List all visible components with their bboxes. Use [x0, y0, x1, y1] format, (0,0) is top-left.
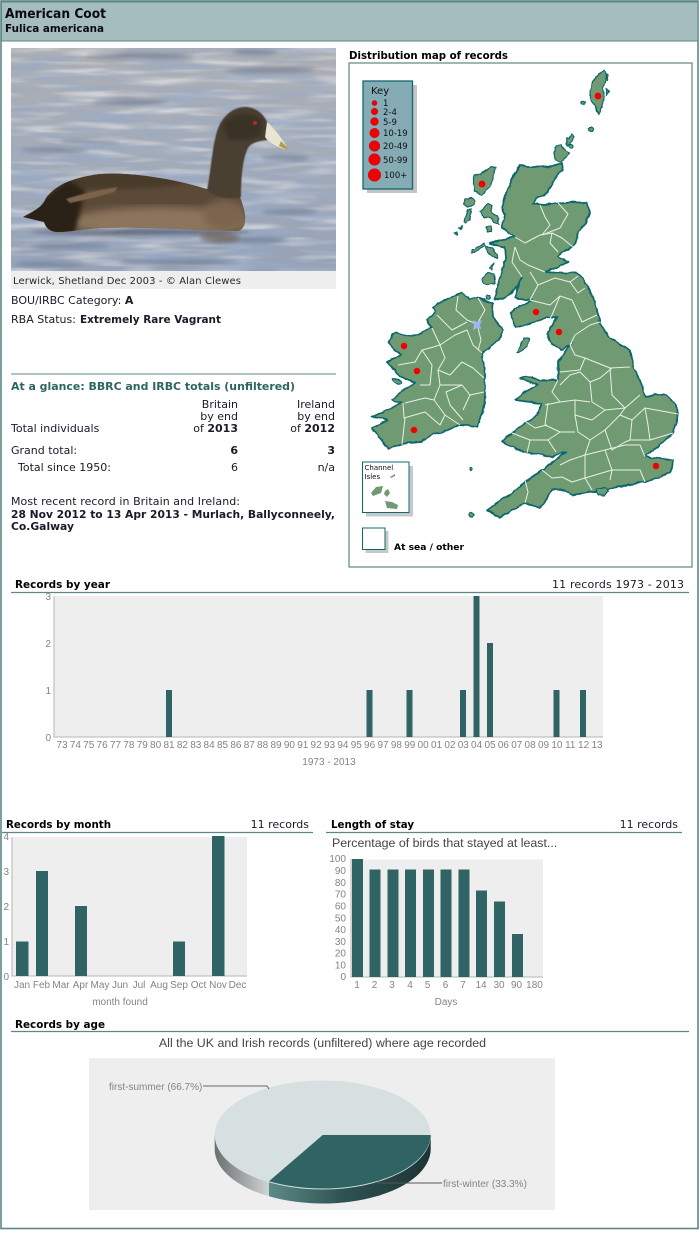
- map: Northern and Western Isles: [392, 70, 609, 518]
- bar chart: year: 88: [257, 740, 269, 751]
- bar chart: month: 0: [3, 972, 9, 983]
- bar chart: year: 00: [418, 740, 429, 751]
- bar chart: year: 98: [391, 740, 402, 751]
- total since 1950 row: 6: [231, 461, 238, 474]
- chart subtitle: All the UK and Irish records (unfiltered) where age recorded: [159, 1036, 486, 1050]
- bar chart: year: 82: [177, 740, 188, 751]
- bar chart: days: 30: [335, 937, 346, 948]
- scientific name: Fulica americana: [5, 22, 104, 35]
- table column headers: Total individuals: [10, 422, 100, 435]
- record count: 11 records 1973 - 2013: [552, 578, 684, 591]
- title: American Coot: [5, 7, 106, 22]
- bar chart: year: 10: [551, 740, 563, 751]
- bar chart: month: Aug: [150, 980, 168, 991]
- panel: at a glance totals: [10, 374, 336, 474]
- photo caption: [11, 271, 336, 289]
- bar chart: year: 89: [270, 740, 282, 751]
- bar chart: days: 2: [372, 980, 378, 991]
- bar chart: days: 40: [335, 925, 346, 936]
- map: land masses: [372, 70, 678, 518]
- bar chart: days: 80: [335, 878, 346, 889]
- bar chart: year: 0: [45, 733, 51, 744]
- record count: 11 records: [620, 818, 678, 831]
- table column headers: [10, 398, 335, 435]
- bar chart: month: Feb: [33, 980, 51, 991]
- panel: length of stay: [326, 818, 682, 1008]
- bar chart: days: Days: [435, 997, 457, 1008]
- Channel Isles inset: Isles: [364, 473, 380, 481]
- bird head shade: [222, 114, 262, 140]
- RBA status: RBA Status:: [11, 313, 76, 326]
- table column headers: by end: [200, 410, 238, 423]
- bar chart: year: 73: [56, 740, 68, 751]
- bar chart: days: 5: [425, 980, 431, 991]
- map key: 100+: [384, 171, 407, 181]
- BOU/IRBC category: BOU/IRBC Category: A: [11, 294, 134, 307]
- bar chart: year: 1973 - 2013: [302, 757, 356, 768]
- bar chart: year: 83: [190, 740, 202, 751]
- RBA status: [11, 313, 221, 326]
- map key: 2-4: [383, 108, 397, 118]
- bar chart: days: 3: [389, 980, 395, 991]
- bird reflection: [30, 230, 250, 243]
- bird upper back: [56, 174, 188, 190]
- table column headers: by end: [297, 410, 335, 423]
- chart subtitle: Percentage of birds that stayed at least...: [332, 836, 557, 850]
- bar chart: month: Mar: [52, 980, 70, 991]
- total since 1950 row: [17, 461, 335, 474]
- bar chart: days: 10: [335, 960, 346, 972]
- bar chart: year: 75: [83, 740, 95, 751]
- Channel Isles inset: Channel: [364, 464, 393, 472]
- bar chart: year: 02: [444, 740, 456, 751]
- bar chart: month: 1: [3, 937, 9, 948]
- panel: records by age: [11, 1018, 689, 1210]
- pie chart: age: first-winter (33.3%): [443, 1179, 527, 1190]
- bird tail: [20, 180, 85, 235]
- bar chart: year: 11: [565, 740, 576, 751]
- bar chart: year: [45, 592, 603, 768]
- at sea box: [362, 528, 465, 553]
- bar chart: year: 79: [137, 740, 148, 751]
- most recent record: Most recent record in Britain and Ireland:: [11, 495, 240, 508]
- bar chart: year: 85: [217, 740, 228, 751]
- bar chart: year: 95: [351, 740, 362, 751]
- map key: [363, 81, 417, 193]
- bar chart: year: 81: [163, 740, 175, 751]
- bar chart: year: 94: [337, 740, 349, 751]
- bar chart: month: Jan: [14, 980, 30, 991]
- bar chart: days: 7: [460, 980, 466, 991]
- bar chart: days: 1: [354, 980, 360, 991]
- bar chart: year: 78: [123, 740, 135, 751]
- bar chart: days: 90: [335, 866, 346, 877]
- bar chart: year: 2: [45, 639, 51, 650]
- map: county boundaries, Ireland: [398, 296, 485, 445]
- bar chart: days: 70: [335, 890, 346, 900]
- bar chart: year: 06: [498, 740, 509, 751]
- bar chart: year: 97: [377, 740, 389, 751]
- bar chart: days: 6: [443, 980, 449, 991]
- photo: American Coot on water: [11, 48, 336, 271]
- bird flank: [76, 204, 245, 231]
- panel: records by month: [2, 818, 313, 1008]
- bar chart: days: 100: [329, 854, 346, 865]
- map key: 1: [383, 99, 388, 109]
- bar chart: year: 80: [150, 740, 162, 751]
- bar chart: days: [329, 854, 543, 1008]
- header band: [2, 2, 698, 41]
- bar chart: days: 0: [340, 972, 346, 983]
- total since 1950 row: n/a: [318, 461, 335, 474]
- bird eye: [253, 121, 257, 125]
- bar chart: year: 76: [97, 740, 108, 751]
- RBA status: Extremely Rare Vagrant: [80, 313, 221, 326]
- bar chart: year: 09: [538, 740, 549, 751]
- map key: 10-19: [383, 129, 408, 139]
- bar chart: month: Sep: [170, 980, 188, 991]
- heading: Records by age: [15, 1018, 105, 1031]
- bar chart: year: 91: [297, 740, 309, 751]
- bar chart: days: 4: [407, 980, 413, 991]
- bar chart: days: 14: [475, 980, 487, 991]
- bar chart: days: 180: [526, 980, 543, 991]
- bar chart: month: Nov: [209, 980, 227, 991]
- bird neck and head: [207, 107, 268, 198]
- bar chart: year: 90: [284, 740, 295, 751]
- map key: 50-99: [383, 156, 408, 166]
- photo caption: Lerwick, Shetland Dec 2003 - © Alan Clewes: [13, 276, 241, 287]
- grand total row: 3: [327, 444, 335, 457]
- bar chart: year: 12: [578, 740, 590, 751]
- bar chart: year: 86: [230, 740, 242, 751]
- table column headers: Britain: [202, 398, 238, 411]
- bar chart: year: 3: [45, 592, 51, 603]
- map: Ireland: [372, 293, 503, 448]
- bar chart: year: 04: [471, 740, 483, 751]
- bar chart: year: 99: [404, 740, 416, 751]
- bar chart: days: 20: [335, 948, 346, 960]
- bar chart: year: 05: [484, 740, 496, 751]
- map: county boundaries, Great Britain: [512, 203, 678, 503]
- bar chart: year: 01: [431, 740, 442, 751]
- bird body: [23, 174, 246, 232]
- bar chart: year: 08: [525, 740, 536, 751]
- bar chart: days: 50: [335, 914, 346, 924]
- table column headers: Ireland: [297, 398, 335, 411]
- heading: Records by year: [15, 578, 111, 591]
- bar chart: year: 96: [364, 740, 376, 751]
- record count: 11 records: [251, 818, 309, 831]
- bar chart: month: Jun: [112, 980, 128, 991]
- grand total row: Grand total:: [11, 444, 77, 457]
- heading: Records by month: [6, 818, 111, 831]
- bar chart: year: 87: [244, 740, 255, 751]
- bird bill: [265, 122, 287, 150]
- bar chart: year: 74: [70, 740, 81, 751]
- bar chart: month: Dec: [229, 980, 246, 991]
- bar chart: days: 90: [511, 980, 522, 991]
- map: Lough Neagh: [473, 320, 482, 330]
- bar chart: year: 13: [591, 740, 603, 751]
- bar chart: year: 1: [45, 686, 51, 697]
- bar chart: month: May: [91, 980, 109, 991]
- most recent record: 28 Nov 2012 to 13 Apr 2013 - Murlach, Ballyconneely,: [11, 508, 335, 521]
- grand total row: [11, 444, 335, 457]
- map key: Key: [371, 86, 389, 97]
- map key: 20-49: [383, 142, 408, 152]
- bar chart: year: 77: [110, 740, 121, 751]
- heading: Length of stay: [331, 818, 414, 831]
- map key: 5-9: [383, 118, 397, 128]
- table column headers: of 2012: [290, 422, 335, 435]
- Channel Isles inset: [362, 462, 413, 516]
- bar chart: days: 60: [335, 902, 346, 912]
- most recent record: [11, 495, 335, 533]
- panel: distribution map: [349, 63, 692, 567]
- most recent record: Co.Galway: [11, 520, 74, 533]
- bar chart: month: 2: [3, 902, 9, 913]
- bar chart: month: Apr: [73, 980, 89, 991]
- bar chart: year: 92: [311, 740, 322, 751]
- bar chart: month: month found: [92, 997, 148, 1008]
- panel: records by year: [11, 578, 689, 768]
- map: record dots: [401, 93, 659, 469]
- bar chart: month: Oct: [191, 980, 206, 991]
- pie chart: age: [89, 1058, 555, 1210]
- table column headers: of 2013: [193, 422, 238, 435]
- bird wing band: [66, 187, 118, 203]
- bar chart: year: 03: [458, 740, 469, 751]
- bar chart: days: 30: [493, 980, 505, 991]
- map: Great Britain: [487, 163, 678, 518]
- at sea box: At sea / other: [394, 543, 465, 553]
- bar chart: year: 07: [511, 740, 523, 751]
- bar chart: month: 3: [3, 867, 9, 878]
- bar chart: month: 4: [3, 832, 9, 843]
- bar chart: year: 93: [324, 740, 335, 751]
- bar chart: month: Jul: [133, 980, 145, 991]
- grand total row: 6: [230, 444, 238, 457]
- at a glance heading: At a glance: BBRC and IRBC totals (unfiltered): [11, 380, 295, 393]
- distribution map heading: Distribution map of records: [349, 49, 508, 62]
- total since 1950 row: Total since 1950:: [17, 461, 111, 474]
- pie chart: age: first-summer (66.7%): [109, 1082, 202, 1093]
- bar chart: year: 84: [204, 740, 215, 751]
- bar chart: month: [3, 832, 247, 1008]
